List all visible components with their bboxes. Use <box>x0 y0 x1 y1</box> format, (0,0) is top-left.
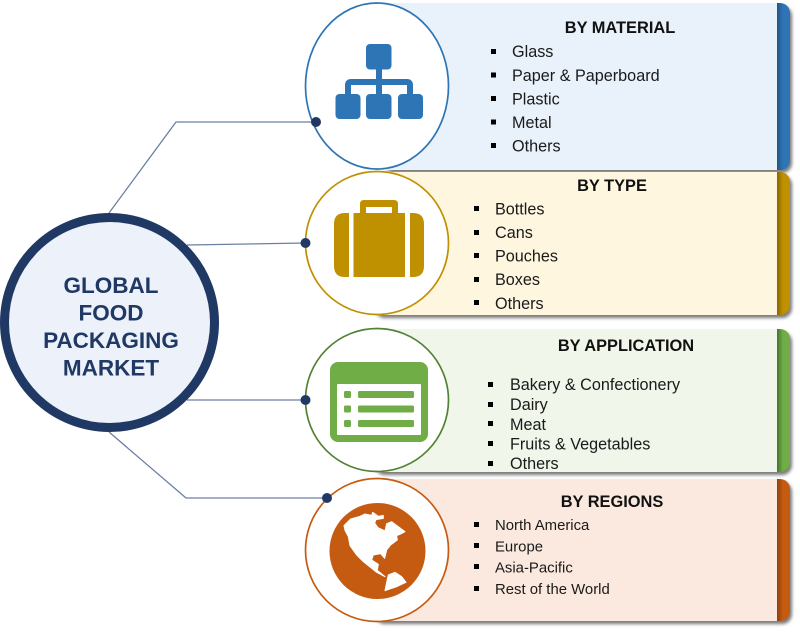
icon circle: by regions globe <box>306 478 448 622</box>
list: materials: Plastic <box>512 90 560 108</box>
icon circle: by type briefcase <box>306 172 448 314</box>
list: types <box>474 200 558 313</box>
list: types: Boxes <box>495 271 540 289</box>
list: applications: Meat <box>510 416 546 434</box>
list: types: Cans <box>495 224 533 242</box>
list: materials: Others <box>512 138 561 156</box>
connector lines <box>109 122 327 498</box>
list: regions: North America <box>495 518 590 534</box>
list: regions: Rest of the World <box>495 582 610 598</box>
heading: by application: BY APPLICATION <box>558 337 694 355</box>
list: materials: Paper & Paperboard <box>512 67 660 85</box>
panel: by regions <box>375 479 792 624</box>
title: MARKET <box>63 356 159 380</box>
list: types: Bottles <box>495 200 544 218</box>
panel: by type <box>375 172 792 318</box>
list: types: Pouches <box>495 248 558 266</box>
heading: by regions: BY REGIONS <box>561 493 663 511</box>
title: GLOBAL <box>64 273 159 298</box>
connector dots <box>300 117 332 503</box>
list: applications: Others <box>510 455 559 473</box>
list: applications: Dairy <box>510 396 549 414</box>
panel: by application <box>375 329 792 475</box>
title: PACKAGING <box>43 328 179 353</box>
list: applications: Bakery & Confectionery <box>510 376 681 394</box>
list: regions: Asia-Pacific <box>495 560 573 576</box>
list: applications <box>488 376 681 473</box>
list: regions <box>474 518 610 598</box>
list: materials <box>491 43 660 156</box>
list: materials: Glass <box>512 43 553 61</box>
heading: by material: BY MATERIAL <box>565 19 675 37</box>
icon circle: by application list window <box>306 328 448 472</box>
list: regions: Europe <box>495 540 543 556</box>
title: FOOD <box>78 300 144 326</box>
central circle: global food packaging market <box>4 218 214 428</box>
heading: by type: BY TYPE <box>577 177 647 195</box>
list: types: Others <box>495 295 544 313</box>
icon circle: by material hierarchy <box>306 3 448 169</box>
list: applications: Fruits & Vegetables <box>510 436 650 454</box>
list: materials: Metal <box>512 114 552 132</box>
panel: by material <box>375 3 792 173</box>
